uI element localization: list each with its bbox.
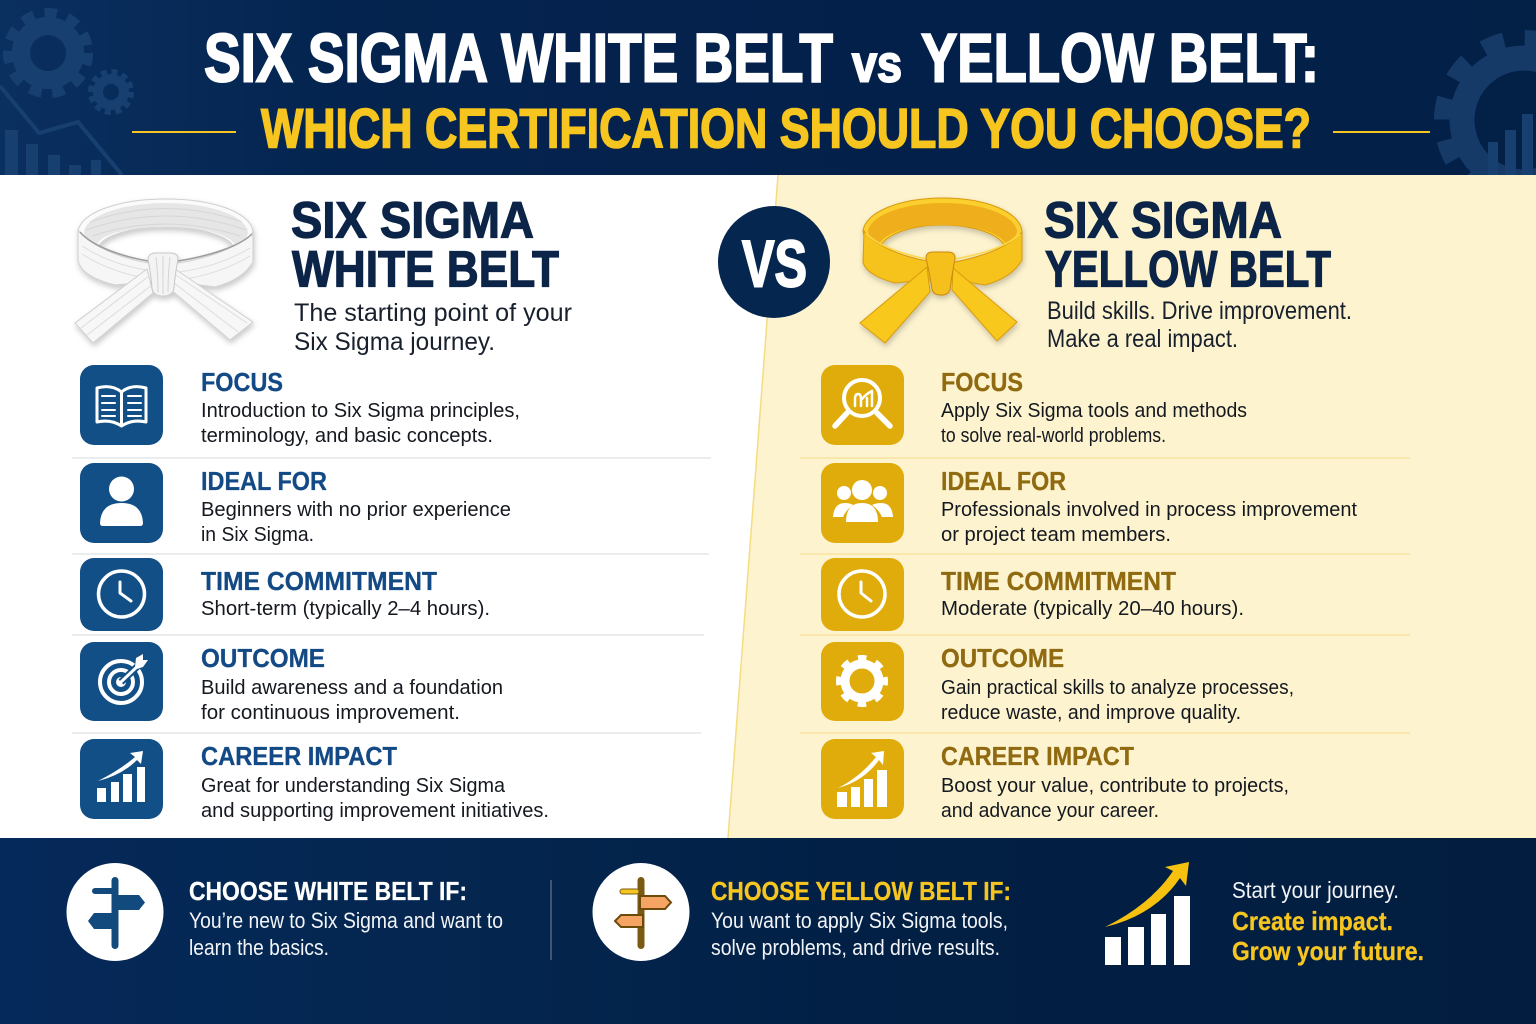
VS badge: VS [742,226,807,300]
focus text: terminology, and basic concepts. [201,425,493,447]
focus text: Introduction to Six Sigma principles, [201,400,520,422]
title line 1: SIX SIGMA WHITE BELT [204,20,833,96]
row: outcome [80,642,503,724]
tagline: Six Sigma journey. [294,328,495,356]
time commitment text [201,566,490,620]
choose white belt text: CHOOSE WHITE BELT IF: [189,876,467,906]
outcome text: OUTCOME [941,643,1064,673]
yellow belt header [860,192,1352,353]
ideal for text: IDEAL FOR [941,466,1066,496]
header banner [0,0,1536,202]
outcome text [941,643,1294,724]
panel: white belt details [80,365,549,822]
icon: white belt [75,199,253,343]
row: career impact [80,739,549,822]
footer band [0,838,1536,1024]
row: ideal for [80,463,511,546]
icon: target [80,642,163,721]
time commitment text: TIME COMMITMENT [201,566,437,596]
choose yellow belt text: CHOOSE YELLOW BELT IF: [711,876,1011,906]
VS badge [718,206,830,318]
heading: Six Sigma White Belt: SIX SIGMA [291,192,534,248]
choose white belt text: learn the basics. [189,935,329,960]
row: focus [821,365,1247,447]
focus text: to solve real-world problems. [941,425,1166,447]
panel: yellow belt details [821,365,1357,822]
focus text: FOCUS [201,367,283,397]
panel: yellow belt background [728,175,1536,838]
career impact text [941,741,1289,822]
icon: growth chart [80,739,163,819]
focus text: FOCUS [941,367,1023,397]
ideal for text: or project team members. [941,524,1171,546]
career impact text: Boost your value, contribute to projects, [941,775,1289,797]
icon: yellow belt [860,198,1022,343]
choose white belt text [189,876,503,960]
outcome text: reduce waste, and improve quality. [941,702,1241,724]
icon: open book [80,365,163,445]
icon: growth chart [821,739,904,819]
time commitment text: TIME COMMITMENT [941,566,1176,596]
decorative gear and chart, right [1442,38,1536,202]
outcome text: Gain practical skills to analyze processes, [941,677,1294,699]
focus text [941,367,1247,447]
career impact text: and supporting improvement initiatives. [201,800,549,822]
heading: Six Sigma White Belt [291,192,559,298]
focus text: Apply Six Sigma tools and methods [941,400,1247,422]
ideal for text [941,466,1357,546]
icon: clock [80,558,163,631]
ideal for text: in Six Sigma. [201,524,314,546]
heading: Six Sigma White Belt: WHITE BELT [292,240,559,298]
heading: Six Sigma Yellow Belt: SIX SIGMA [1044,192,1282,248]
ideal for text: Beginners with no prior experience [201,499,511,521]
time commitment text: Short-term (typically 2–4 hours). [201,598,490,620]
decorative gears and chart, left [0,14,131,175]
tagline [294,299,572,356]
icon: magnifier [821,365,904,445]
tagline: The starting point of your [294,299,572,327]
icon: team [821,463,904,543]
career impact text: CAREER IMPACT [941,741,1134,771]
career impact text: and advance your career. [941,800,1159,822]
icon: gear [821,642,904,721]
ideal for text [201,466,511,546]
outcome text [201,643,503,724]
focus text [201,367,520,447]
choose yellow belt text: You want to apply Six Sigma tools, [711,908,1008,933]
outcome text: OUTCOME [201,643,325,673]
tagline: Build skills. Drive improvement. [1047,297,1352,325]
closing message [1232,877,1424,966]
icon: growth chart with arrow [1105,862,1190,965]
icon: white belt signpost [66,863,164,961]
outcome text: for continuous improvement. [201,702,460,724]
heading: Six Sigma Yellow Belt [1044,192,1331,298]
title line 2 with rules: WHICH CERTIFICATION SHOULD YOU CHOOSE? [261,96,1311,160]
icon: clock [821,558,904,631]
heading: Six Sigma Yellow Belt: YELLOW BELT [1045,240,1331,298]
row: time commitment [821,558,1244,631]
ideal for text: IDEAL FOR [201,466,327,496]
panel: white belt background [0,175,780,838]
icon: yellow belt signpost [592,863,690,961]
row: focus [80,365,520,447]
row: career impact [821,739,1289,822]
ideal for text: Professionals involved in process improvement [941,499,1357,521]
title line 1: YELLOW BELT: [921,20,1319,96]
tagline [1047,297,1352,353]
time commitment text: Moderate (typically 20–40 hours). [941,598,1244,620]
row: time commitment [80,558,490,631]
career impact text: CAREER IMPACT [201,741,397,771]
closing message: Start your journey. [1232,877,1399,903]
choose yellow belt text [711,876,1011,960]
time commitment text [941,566,1244,620]
white belt header [75,192,572,356]
tagline: Make a real impact. [1047,325,1238,353]
closing message: Create impact. [1232,906,1393,936]
career impact text [201,741,549,822]
career impact text: Great for understanding Six Sigma [201,775,506,797]
title line 1: vs [852,36,902,94]
choose white belt text: You’re new to Six Sigma and want to [189,908,503,933]
choose yellow belt text: solve problems, and drive results. [711,935,1000,960]
closing message: Grow your future. [1232,936,1424,966]
outcome text: Build awareness and a foundation [201,677,503,699]
row: ideal for [821,463,1357,546]
icon: person [80,463,163,543]
row: outcome [821,642,1294,724]
